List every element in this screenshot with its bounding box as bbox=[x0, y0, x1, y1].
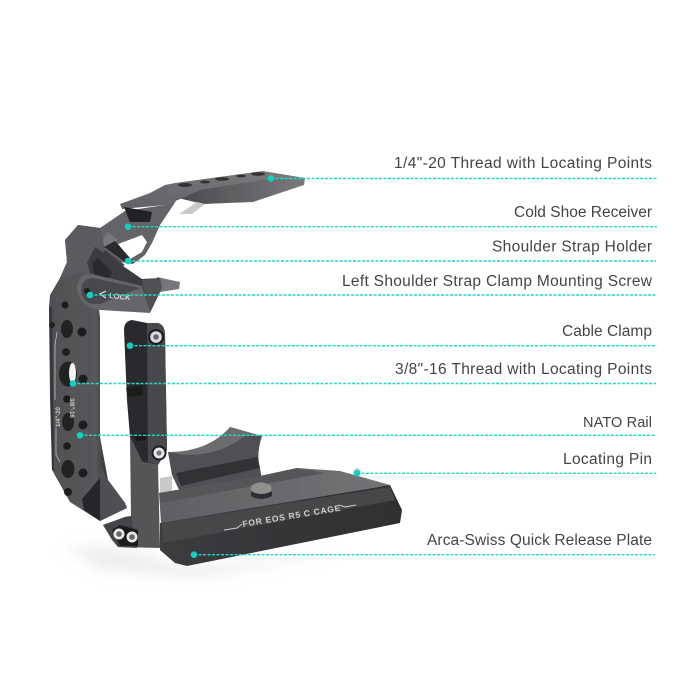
vertical rail arm bbox=[124, 320, 167, 465]
callout: locating pin bbox=[354, 451, 656, 477]
lower column bbox=[103, 437, 160, 548]
callout: 3/8"-16 thread: 3/8"-16 Thread with Locating Points bbox=[395, 361, 652, 378]
shoulder strap clamp with lock lever bbox=[77, 247, 180, 313]
floor shadow bbox=[65, 546, 340, 578]
top handle arm bbox=[120, 171, 305, 214]
callout: Arca-Swiss plate bbox=[191, 532, 655, 558]
callout: locating pin: Locating Pin bbox=[563, 451, 652, 468]
callout: cable clamp: Cable Clamp bbox=[562, 323, 652, 340]
callout: shoulder strap holder: Shoulder Strap Holder bbox=[492, 238, 652, 256]
callout: clamp mounting screw bbox=[87, 273, 656, 298]
callout: 1/4"-20 thread bbox=[268, 155, 657, 182]
callout: Arca-Swiss plate: Arca-Swiss Quick Release Plate bbox=[427, 532, 652, 549]
left side plate bbox=[49, 225, 127, 521]
callout: 3/8"-16 thread bbox=[70, 361, 656, 387]
callout: NATO rail bbox=[77, 415, 656, 439]
callout: NATO rail: NATO Rail bbox=[583, 415, 652, 431]
cold shoe receiver and strut with triangular opening bbox=[90, 197, 185, 264]
cradle support bbox=[160, 427, 262, 495]
Arca-Swiss base plate: FOR EOS R5 C CAGE bbox=[242, 503, 342, 529]
left side plate: 3/8"-16 bbox=[68, 398, 74, 419]
callout: cold shoe receiver: Cold Shoe Receiver bbox=[514, 204, 652, 221]
callout: shoulder strap holder bbox=[125, 238, 656, 264]
product photo: camera cage bbox=[49, 171, 402, 578]
hex screws bbox=[112, 329, 166, 546]
shoulder strap clamp with lock lever: LOCK bbox=[109, 291, 131, 302]
callout: cable clamp bbox=[127, 323, 656, 349]
Arca-Swiss base plate bbox=[159, 468, 402, 566]
callout: 1/4"-20 thread: 1/4"-20 Thread with Locating Points bbox=[394, 155, 652, 172]
callout: clamp mounting screw: Left Shoulder Strap Clamp Mounting Screw bbox=[342, 273, 653, 290]
callout: cold shoe receiver bbox=[125, 204, 657, 230]
left side plate: 1/4"-20 bbox=[56, 406, 62, 427]
